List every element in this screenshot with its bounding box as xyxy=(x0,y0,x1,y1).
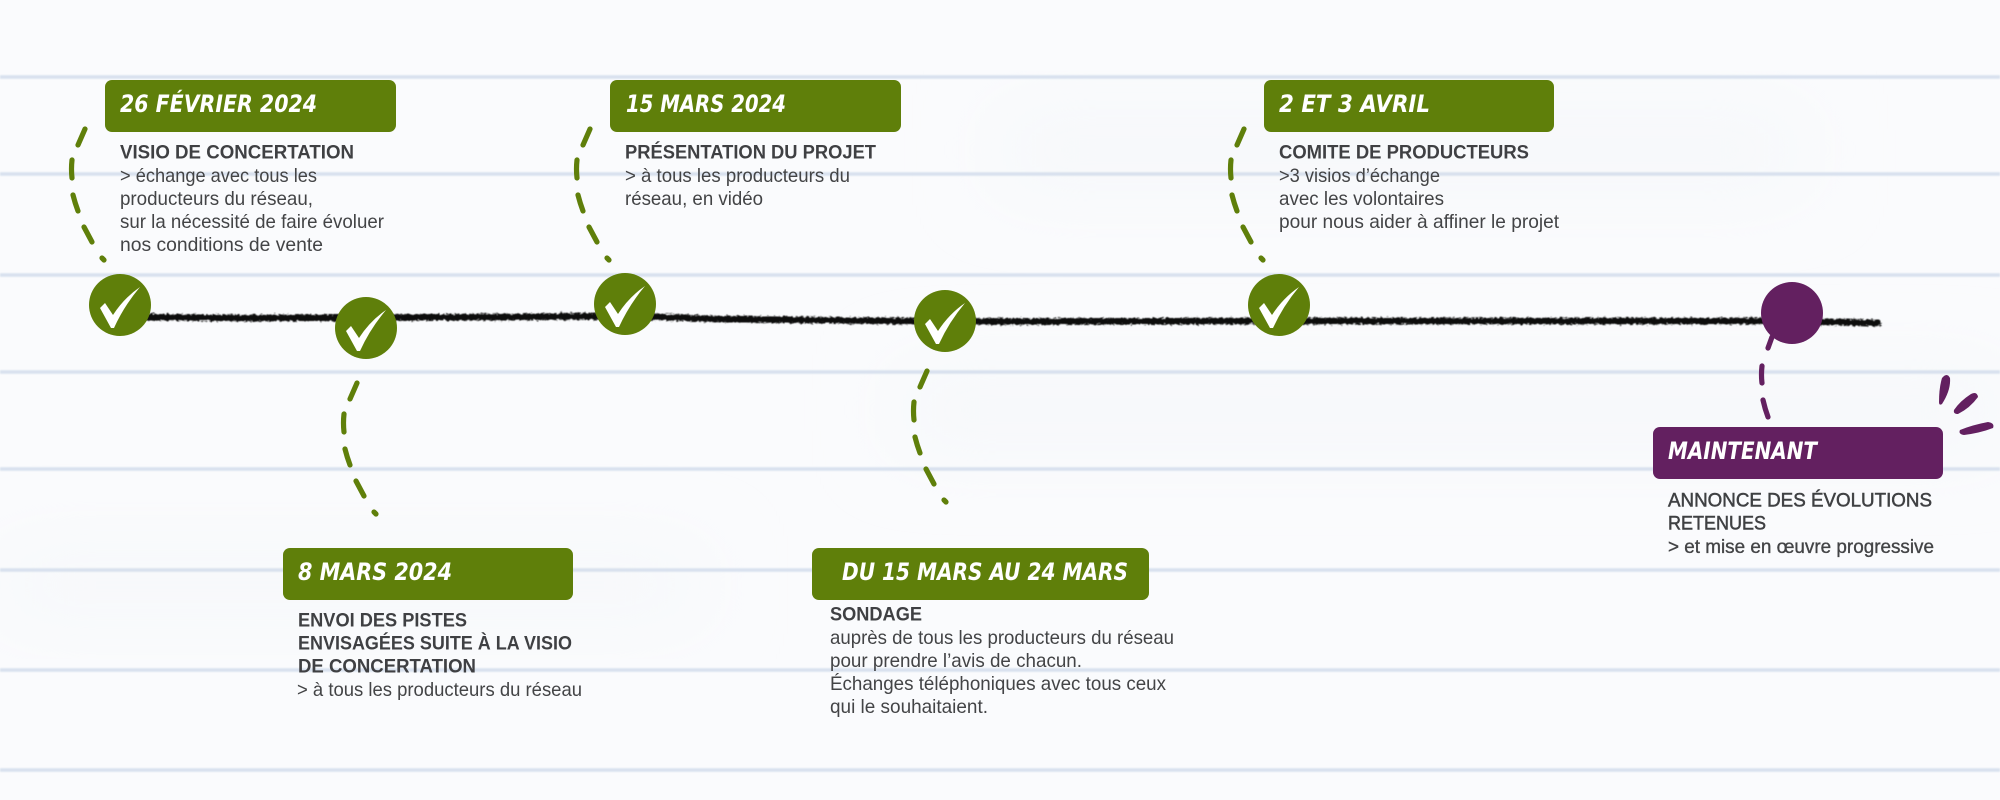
check marker 3 xyxy=(594,273,656,335)
dashed connector 4 xyxy=(914,371,946,502)
step 5: 2 et 3 avril xyxy=(1230,80,1560,336)
date label 2 xyxy=(283,548,573,600)
text block 3: réseau, en vidéo xyxy=(625,188,763,210)
text block 5: pour nous aider à affiner le projet xyxy=(1279,211,1560,233)
text block 2: DE CONCERTATION xyxy=(298,656,476,678)
text block 1: > échange avec tous les xyxy=(120,165,317,187)
text block 3: PRÉSENTATION DU PROJET xyxy=(625,140,876,164)
date label 6: MAINTENANT xyxy=(1668,437,1818,465)
date label 3: 15 MARS 2024 xyxy=(626,90,786,118)
check marker 1 xyxy=(89,274,151,336)
date label 4 xyxy=(812,548,1149,600)
step 1: 26 février 2024 xyxy=(72,80,396,336)
text block 6: > et mise en œuvre progressive xyxy=(1668,536,1934,558)
text block 5: avec les volontaires xyxy=(1279,188,1444,210)
text block 6: RETENUES xyxy=(1668,512,1766,534)
text block 1: producteurs du réseau, xyxy=(120,188,313,210)
date label 3 xyxy=(610,80,901,132)
text block 1 xyxy=(120,142,384,256)
dashed connector 1 xyxy=(72,129,104,260)
dashed connector 2 xyxy=(344,383,376,514)
text block 4: pour prendre l’avis de chacun. xyxy=(830,650,1082,672)
text block 4: SONDAGE xyxy=(830,604,922,626)
text block 4: qui le souhaitaient. xyxy=(830,696,988,718)
text block 2: ENVISAGÉES SUITE À LA VISIO xyxy=(298,632,572,654)
date label 4: DU 15 MARS AU 24 MARS xyxy=(842,558,1128,586)
text block 2: ENVOI DES PISTES xyxy=(298,610,467,632)
step 2: 8 mars 2024 xyxy=(283,297,582,701)
date label 5 xyxy=(1264,80,1554,132)
icon: emphasis sparks xyxy=(1939,375,1993,435)
step 6: maintenant xyxy=(1653,282,1993,558)
text block 5: COMITE DE PRODUCTEURS xyxy=(1279,142,1529,164)
text block 1: nos conditions de vente xyxy=(120,234,323,256)
text block 5 xyxy=(1279,142,1560,233)
text block 4: auprès de tous les producteurs du réseau xyxy=(830,627,1174,649)
text block 4: Échanges téléphoniques avec tous ceux xyxy=(830,672,1166,695)
text block 6 xyxy=(1668,488,1934,558)
check marker 5 xyxy=(1248,274,1310,336)
date label 2: 8 MARS 2024 xyxy=(298,558,452,586)
text block 1: VISIO DE CONCERTATION xyxy=(120,142,354,164)
date label 6 xyxy=(1653,427,1943,479)
purple marker xyxy=(1761,282,1823,344)
text block 1: sur la nécessité de faire évoluer xyxy=(120,211,384,233)
step 4: du 15 mars au 24 mars xyxy=(812,290,1174,718)
date label 5: 2 ET 3 AVRIL xyxy=(1279,90,1430,118)
dashed connector 6 xyxy=(1762,337,1772,417)
check marker 2 xyxy=(335,297,397,359)
text block 6: ANNONCE DES ÉVOLUTIONS xyxy=(1668,488,1932,512)
timeline line xyxy=(125,316,1878,323)
text block 3: > à tous les producteurs du xyxy=(625,165,850,187)
dashed connector 5 xyxy=(1230,129,1263,260)
date label 1 xyxy=(105,80,396,132)
text block 5: >3 visios d’échange xyxy=(1279,165,1440,187)
dashed connector 3 xyxy=(576,129,609,260)
text block 2 xyxy=(297,610,582,701)
text block 4 xyxy=(830,604,1174,718)
step 3: 15 mars 2024 xyxy=(576,80,901,335)
check marker 4 xyxy=(914,290,976,352)
text block 2: > à tous les producteurs du réseau xyxy=(297,679,582,701)
text block 3 xyxy=(625,140,876,210)
date label 1: 26 FÉVRIER 2024 xyxy=(120,89,317,118)
